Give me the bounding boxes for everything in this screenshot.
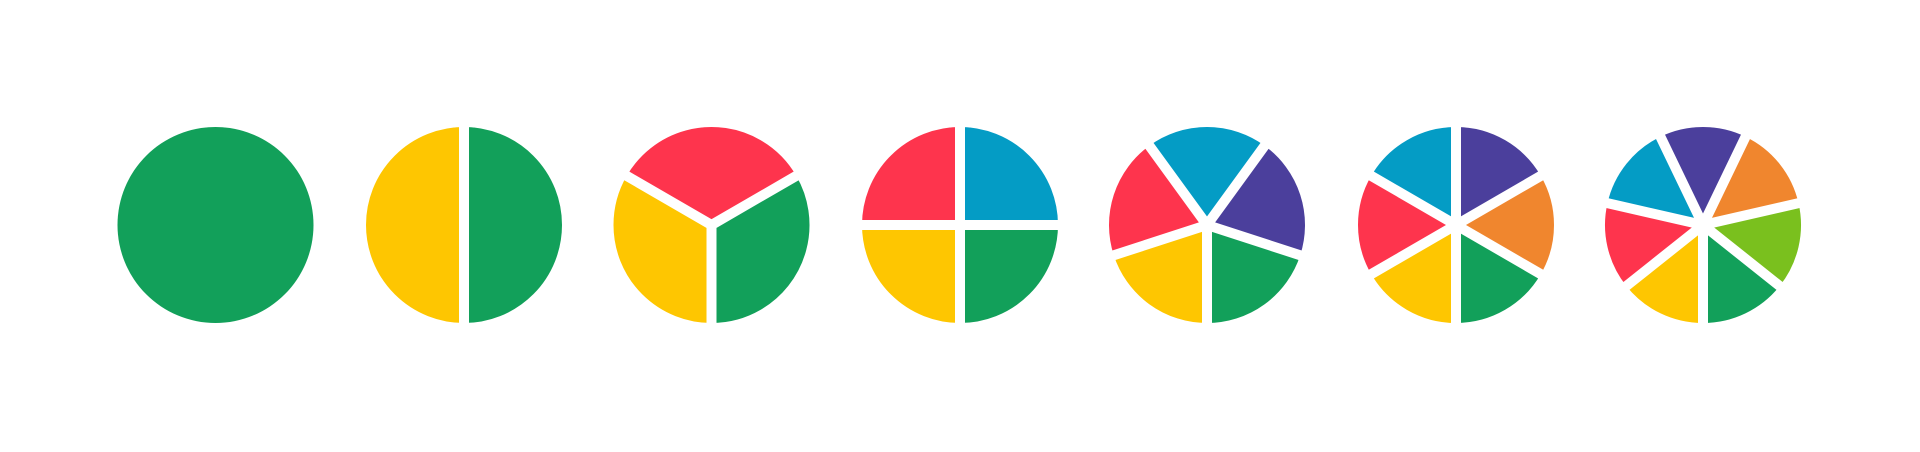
pie: 5 fifths xyxy=(1110,142,1304,327)
pie: 6 sixths xyxy=(1368,123,1544,327)
pie: 2 halves xyxy=(415,123,513,327)
pie: 1 whole xyxy=(118,127,314,323)
pie: 3 thirds xyxy=(624,158,800,327)
pie: 4 quarters xyxy=(858,123,1062,327)
pie: 7 sevenths xyxy=(1604,133,1802,327)
